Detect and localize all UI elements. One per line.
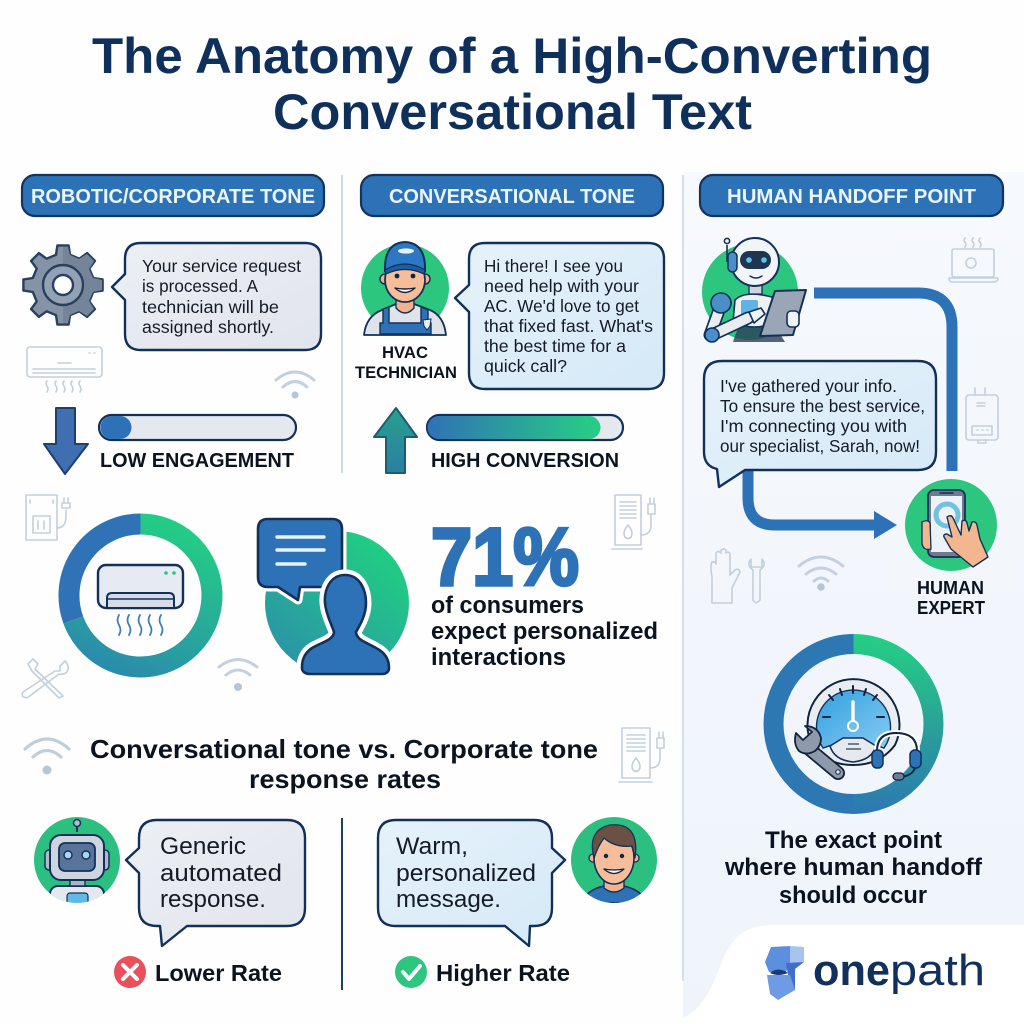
speech bubble: corporate message <box>112 243 321 350</box>
label: hvac technician: HVAC <box>382 343 428 362</box>
icon: hand on phone <box>905 479 997 571</box>
icon: faint air conditioner <box>27 347 102 392</box>
logo wordmark: path <box>890 946 985 995</box>
speech bubble: corporate message: technician will be <box>142 297 279 317</box>
donut chart: gauge with tools <box>774 644 934 804</box>
arrow: robot to human expert <box>814 293 952 471</box>
right panel background <box>682 172 1024 1024</box>
icon: faint wifi <box>799 557 843 591</box>
header: robotic corporate tone <box>22 175 324 216</box>
outcome: higher rate <box>395 956 570 988</box>
logo mark <box>765 946 804 1000</box>
header: conversational tone <box>361 175 663 216</box>
icon: faint laptop <box>949 238 998 282</box>
speech bubble: generic: response. <box>160 886 266 913</box>
donut chart: air conditioner <box>69 524 212 667</box>
speech bubble: corporate message: is processed. A <box>142 276 258 296</box>
speech bubble: handoff message: I've gathered your info. <box>720 376 897 396</box>
icon: faint wifi <box>25 739 69 774</box>
speech bubble: handoff message: our specialist, Sarah, now! <box>720 436 920 456</box>
icon: faint electrical panel <box>26 495 70 540</box>
icon: gear <box>23 245 103 325</box>
arrow: up <box>374 408 417 473</box>
label: human expert: HUMAN <box>917 578 984 598</box>
panel: human handoff point <box>700 175 1003 909</box>
logo wordmark: one <box>813 946 890 995</box>
speech bubble: conversational message: Hi there! I see you <box>484 256 623 276</box>
header: robotic corporate tone: ROBOTIC/CORPORATE TONE <box>31 186 315 208</box>
comparison heading: Conversational tone vs. Corporate tone <box>90 734 598 764</box>
statistic: 71%: 71% <box>431 512 579 603</box>
outcome: higher rate: Higher Rate <box>436 960 570 986</box>
speech bubble: corporate message: Your service request <box>142 256 301 276</box>
speech bubble: conversational message <box>455 243 664 389</box>
icon: faint water heater <box>966 388 998 443</box>
speech bubble: warm <box>378 820 565 946</box>
speech bubble: conversational message: that fixed fast. What's <box>484 316 653 336</box>
speech bubble: handoff message <box>704 361 936 487</box>
speech bubble: warm: Warm, <box>396 833 468 860</box>
header: human handoff point <box>700 175 1003 216</box>
avatar: person <box>571 817 657 903</box>
icon: faint tools <box>22 659 68 698</box>
comparison section <box>25 728 664 990</box>
speech bubble: corporate message: assigned shortly. <box>142 317 274 337</box>
label: human expert <box>917 578 985 618</box>
icon: faint furnace <box>612 495 655 549</box>
title: Conversational Text <box>273 84 752 140</box>
panel: conversational tone <box>355 175 664 473</box>
statistic caption: interactions <box>431 644 566 671</box>
label: human expert: EXPERT <box>917 598 985 618</box>
icon: hvac technician <box>361 242 449 335</box>
title: The Anatomy of a High-Converting <box>92 28 932 84</box>
label: hvac technician <box>355 343 457 382</box>
icon: robot with tablet <box>702 238 806 342</box>
avatar: robot <box>34 817 120 903</box>
speech bubble: warm: message. <box>396 886 501 913</box>
speech bubble: warm: personalized <box>396 860 536 887</box>
statistic caption: expect personalized <box>431 618 658 645</box>
statistic section <box>22 495 658 698</box>
speech bubble: conversational message: the best time for a <box>484 336 626 356</box>
title <box>92 28 932 140</box>
speech bubble: generic <box>126 820 305 946</box>
label: high conversion: HIGH CONVERSION <box>431 449 619 472</box>
handoff caption: should occur <box>779 882 927 909</box>
speech bubble: generic: automated <box>160 860 282 887</box>
handoff caption <box>724 827 983 909</box>
icon: faint furnace <box>619 728 664 782</box>
comparison heading <box>90 734 598 794</box>
speech bubble: handoff message: To ensure the best service, <box>720 396 925 416</box>
outcome: lower rate: Lower Rate <box>155 960 282 986</box>
outcome: lower rate <box>114 956 282 988</box>
statistic caption <box>431 592 658 671</box>
handoff caption: The exact point <box>765 827 942 854</box>
icon: faint wifi <box>219 660 257 691</box>
progress bar: high conversion <box>427 415 623 440</box>
panel: robotic corporate tone <box>22 175 324 474</box>
statistic caption: of consumers <box>431 592 584 619</box>
speech bubble: generic: Generic <box>160 833 246 860</box>
label: low engagement: LOW ENGAGEMENT <box>100 449 294 472</box>
logo: onepath <box>765 946 985 1000</box>
speech bubble: conversational message: quick call? <box>484 356 567 376</box>
arrow: down <box>44 408 88 474</box>
header: conversational tone: CONVERSATIONAL TONE <box>389 186 635 208</box>
speech bubble: conversational message: AC. We'd love to get <box>484 296 639 316</box>
speech bubble: handoff message: I'm connecting you with <box>720 416 907 436</box>
icon: faint glove and wrench <box>711 549 764 603</box>
pie chart with chat and person <box>258 519 409 675</box>
arrow: message to human expert <box>748 468 897 539</box>
handoff caption: where human handoff <box>724 854 983 881</box>
progress bar: low engagement <box>99 415 296 440</box>
comparison heading: response rates <box>249 764 441 794</box>
logo wordmark <box>813 946 985 995</box>
speech bubble: conversational message: need help with your <box>484 276 639 296</box>
label: hvac technician: TECHNICIAN <box>355 363 457 382</box>
header: human handoff point: HUMAN HANDOFF POINT <box>727 186 976 208</box>
icon: faint wifi <box>276 372 314 398</box>
